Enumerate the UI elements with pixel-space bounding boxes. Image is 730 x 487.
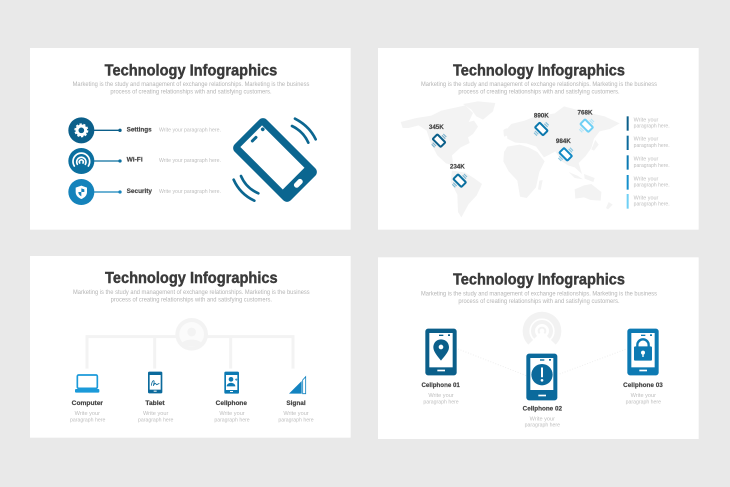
icon: cellphone [224,372,239,394]
label: cellphone 02: paragraph here [525,423,560,429]
marker: 768K [577,110,594,132]
subtitle: process of creating relationships with and satisfying customers. [111,297,272,304]
panel: cellphones [378,257,699,439]
label: cellphone 03: Cellphone 03 [623,383,664,389]
label: computer: paragraph here [70,417,105,423]
label: cellphone 01 [421,383,461,405]
label: cellphone 03 [623,383,664,405]
panel: world map [378,48,699,230]
label: cellphone: Cellphone [216,401,248,407]
wi-fi row [68,148,221,174]
label: cellphone 03: paragraph here [626,399,661,405]
marker: 234K: 234K [450,165,466,171]
legend: paragraph here. [634,143,670,149]
subtitle: process of creating relationships with and satisfying customers. [458,89,620,96]
label: signal [278,401,314,423]
world map [401,101,620,217]
icon: vibrating phone [231,116,319,204]
hierarchy connector with user icon [87,318,293,369]
label: tablet: Tablet [145,401,165,407]
label: signal: Write your [283,411,309,417]
icon: cellphone 01 [425,329,457,375]
title: Technology Infographics [105,62,278,79]
label: cellphone 02: Cellphone 02 [523,406,563,412]
legend: Write your [634,176,659,182]
marker: 345K [429,125,446,147]
label: cellphone 02 [523,406,563,429]
legend: paragraph here. [634,163,670,169]
icon: wifi signal [526,315,558,342]
legend: Write your [634,137,659,143]
label: cellphone 01: Write your [428,393,454,399]
marker: 768K: 768K [577,110,593,116]
marker: 984K [556,139,573,161]
wi-fi row: Wi-Fi [127,158,143,164]
label: signal: Signal [286,401,306,407]
subtitle [73,81,309,96]
subtitle: process of creating relationships with and satisfying customers. [458,298,620,305]
label: tablet [138,401,173,423]
marker: 345K: 345K [429,125,445,131]
label: computer [70,401,105,423]
security row: Security [127,189,153,195]
label: cellphone 02: Write your [530,416,555,422]
wi-fi row: Write your paragraph here. [159,158,221,164]
settings row [68,117,221,143]
subtitle [421,81,657,96]
subtitle: process of creating relationships with and satisfying customers. [110,89,272,96]
label: tablet: paragraph here [138,417,173,423]
label: computer: Write your [75,411,100,417]
legend [627,116,670,209]
title: Technology Infographics [453,62,625,79]
icon: signal [289,377,306,394]
legend: paragraph here. [634,183,670,189]
marker: 890K: 890K [534,114,550,120]
label: cellphone 01: Cellphone 01 [421,383,461,389]
label: tablet: Write your [143,411,169,417]
marker: 890K [534,114,550,136]
title: Technology Infographics [453,272,625,289]
icon: cellphone 03 [627,329,659,375]
legend: Write your [634,117,659,123]
label: cellphone: paragraph here [214,417,250,423]
marker: 984K: 984K [556,139,572,145]
legend: paragraph here. [634,124,670,130]
label: computer: Computer [72,401,104,407]
icon: computer [75,375,99,393]
legend: paragraph here. [634,202,670,208]
subtitle: Marketing is the study and management of exchange relationships. Marketing is the business [421,81,657,88]
icon: cellphone 02 [526,354,557,400]
marker: 234K [450,165,467,187]
panel: phone settings [30,48,351,230]
legend: Write your [634,195,659,201]
subtitle [73,289,310,304]
label: cellphone: Write your [219,411,245,417]
security row: Write your paragraph here. [159,189,221,195]
subtitle [421,290,657,305]
legend: Write your [634,157,659,163]
title: Technology Infographics [105,270,278,287]
settings row: Settings [127,128,152,134]
settings row: Write your paragraph here. [159,128,221,134]
subtitle: Marketing is the study and management of exchange relationships. Marketing is the business [73,289,310,296]
label: cellphone 01: paragraph here [423,399,459,405]
label: cellphone 03: Write your [631,393,656,399]
security row [68,179,221,205]
subtitle: Marketing is the study and management of exchange relationships. Marketing is the business [421,290,657,297]
subtitle: Marketing is the study and management of exchange relationships. Marketing is the business [73,81,309,88]
icon: tablet [148,372,162,393]
panel: device hierarchy [30,256,351,438]
label: cellphone [214,401,250,423]
dotted connectors [458,349,626,376]
label: signal: paragraph here [278,417,314,423]
